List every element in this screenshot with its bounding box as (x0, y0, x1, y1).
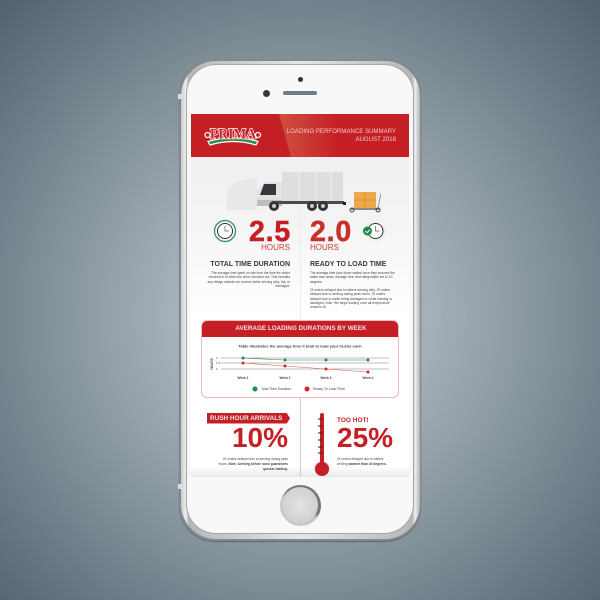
phone body (179, 59, 421, 541)
icon: clock with check (363, 223, 384, 239)
text: ready to load description: Of orders delayed due to trailers arriving dirty. Of orders (310, 288, 390, 292)
text: total time description: any delays outside our control; trailer arriving dirty, hot, or (208, 280, 290, 284)
stat: 2.5 hours (249, 216, 291, 252)
label: too hot: TOO HOT! (337, 417, 369, 424)
number 2.0: 2.0 (310, 216, 352, 248)
text: total time description: The average time spent on site from the time the driver (211, 271, 290, 275)
text: ready to load description: The average time your driver waited once they ensured the (310, 271, 395, 275)
banner title: LOADING PERFORMANCE SUMMARY (287, 128, 396, 135)
text: total time description (208, 271, 290, 288)
line chart: HOURS (210, 358, 214, 370)
text: rush hour description: Of orders delayed due to arriving during peak (223, 457, 288, 461)
text: rush hour description (218, 457, 288, 471)
line chart: Week 4 (363, 376, 374, 380)
truck illustration (227, 172, 381, 212)
home button (280, 484, 320, 526)
line chart (210, 344, 389, 392)
speaker (283, 91, 317, 94)
icon: thermometer (314, 413, 330, 477)
front camera (298, 76, 302, 82)
heading: total time duration: TOTAL TIME DURATION (210, 261, 290, 268)
line chart: Table illustrates the average time it took to load your trucks each (238, 344, 362, 348)
label: rush hour arrivals: RUSH HOUR ARRIVALS (210, 415, 282, 422)
text: ready to load description: delayed due to trailer being damaged or chute missing or (310, 296, 392, 300)
home button face (282, 487, 318, 523)
heading: ready to load time: READY TO LOAD TIME (310, 261, 386, 268)
stat: 2.0 hours (310, 216, 352, 252)
text: ready to load description: delayed due to arriving during peak hours. Of orders (310, 292, 385, 296)
panel: average loading durations (201, 320, 399, 398)
screen (191, 114, 409, 477)
hours label: HOURS (261, 243, 290, 252)
red divider (300, 398, 301, 477)
header banner (191, 114, 409, 157)
stat: 10 percent: 10% (232, 422, 288, 453)
icon: clock with green ring (214, 220, 236, 242)
text: total time description: damaged. (276, 284, 290, 288)
number 2.5: 2.5 (249, 216, 291, 248)
text: too hot description: Of orders delayed due to trailers (337, 457, 383, 461)
text: ready to load description: reaches 40. (310, 305, 327, 309)
text: too hot description: arriving warmer than 40 degrees. (337, 462, 387, 466)
stat: 25 percent: 25% (337, 422, 393, 453)
metal bezel (180, 60, 420, 538)
line chart: Total Time Duration (261, 387, 291, 391)
text: ready to load description (310, 271, 395, 309)
text: ready to load description: trailer was clean, damage free, and refrigeration set to 10 (310, 275, 392, 279)
text: ready to load description: degrees. (310, 280, 323, 284)
text: rush hour description: quicker loading. (263, 467, 288, 471)
text: ready to load description: damaged. Note: We begin loading once all temperature (310, 301, 390, 305)
banner date: AUGUST 2018 (355, 136, 396, 142)
text: too hot description (337, 457, 387, 466)
line chart: 1.5 (216, 361, 221, 365)
label: rush hour arrivals (207, 413, 290, 424)
hours label: HOURS (310, 243, 339, 252)
line chart: Week 3 (321, 376, 332, 380)
line chart: Week 2 (280, 376, 291, 380)
line chart: 2 (216, 356, 218, 360)
line chart: Week 1 (238, 376, 249, 380)
text: total time description: checked in to when the driver checked out. This includes (209, 275, 290, 279)
logo: PRIMA (210, 126, 256, 142)
panel heading (202, 321, 400, 337)
side button bottom (178, 484, 183, 489)
phone white face (187, 65, 413, 533)
panel heading: AVERAGE LOADING DURATIONS BY WEEK (235, 325, 367, 332)
line chart: Ready To Load Time (313, 387, 345, 391)
center divider (300, 211, 301, 320)
text: rush hour description: hours. Note: Arriving before noon guarantees (219, 462, 288, 466)
line chart: 1 (216, 367, 218, 371)
side button top (178, 94, 183, 99)
banner highlight (279, 114, 329, 157)
proximity sensor (262, 90, 270, 96)
